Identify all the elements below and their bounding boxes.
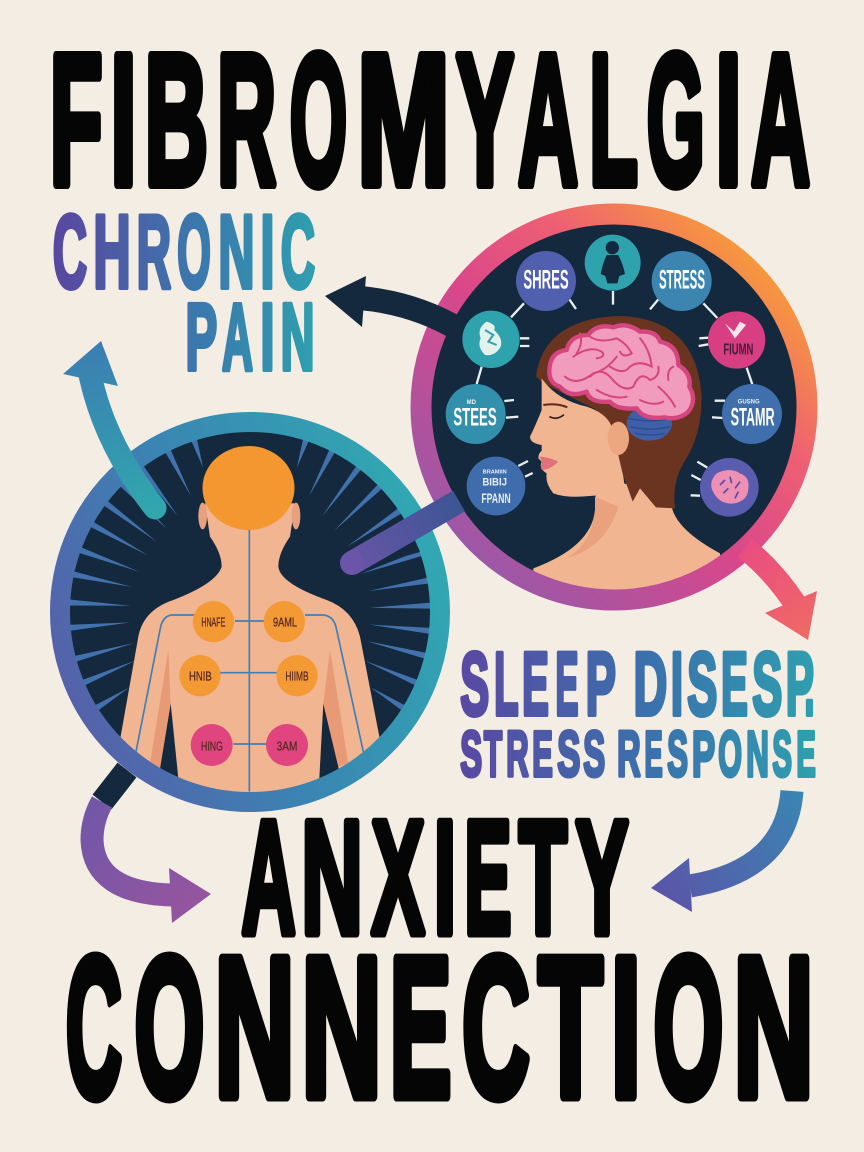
figure: back of torso xyxy=(120,503,380,793)
heading: Sleep disesp: E xyxy=(556,634,578,734)
bubble: STEES: MD xyxy=(467,400,477,406)
bubble: PAIN small text: BRAMIIN xyxy=(483,469,507,475)
arrow: dark arrow to chronic pain xyxy=(325,276,460,330)
heading: Stress response: O xyxy=(718,718,742,790)
heading: Stress response: S xyxy=(583,718,605,790)
pain points with labels: HIIMB xyxy=(285,669,309,684)
title: Fibromyalgia: O xyxy=(290,17,347,224)
heading: Stress response: S xyxy=(772,718,792,790)
title: Connection: O xyxy=(134,917,204,1139)
heading: Stress response: T xyxy=(484,718,502,790)
title: Connection: C xyxy=(462,917,530,1139)
heading: Stress response: N xyxy=(746,718,769,790)
heading: Pain: I xyxy=(260,284,275,390)
head xyxy=(202,446,294,530)
heading: Stress response: E xyxy=(532,718,553,790)
heading: Stress response: R xyxy=(506,718,529,790)
figure: woman profile xyxy=(530,316,723,590)
ring xyxy=(60,422,440,802)
bubble: SHRES: SHRES xyxy=(523,264,569,294)
heading: Pain: P xyxy=(186,284,217,390)
heading: Sleep disesp: L xyxy=(494,634,518,734)
ring xyxy=(421,214,807,600)
title: Fibromyalgia: B xyxy=(145,17,208,224)
heading: Sleep disesp: S xyxy=(752,634,782,734)
topic bubbles with connectors xyxy=(446,235,782,517)
title: Anxiety: E xyxy=(464,788,512,968)
heading: Stress response: S xyxy=(460,718,482,790)
bubble: person icon xyxy=(585,235,641,291)
title: Connection: O xyxy=(654,917,723,1139)
radiating rays xyxy=(69,439,431,710)
title: Anxiety: X xyxy=(372,788,424,968)
title: Anxiety: T xyxy=(519,788,567,968)
topic bubbles with connectors: STRESS xyxy=(659,264,705,294)
bubble: body icon xyxy=(462,311,520,368)
arrow: purple connector between circles xyxy=(340,501,459,575)
heading: Chronic: H xyxy=(93,194,131,310)
title: Fibromyalgia: Y xyxy=(456,17,514,224)
heading: Sleep disesp: S xyxy=(460,634,489,734)
text: C xyxy=(281,194,315,310)
heading: Chronic: I xyxy=(260,194,275,310)
heading: Sleep disesp: D xyxy=(634,634,667,734)
heading: Sleep disesp: E xyxy=(522,634,549,734)
title: Fibromyalgia: L xyxy=(589,17,638,224)
title: Anxiety: N xyxy=(301,788,363,968)
heading: Stress response: E xyxy=(644,718,663,790)
bubble: PAIN small text: BIBIJ xyxy=(482,476,507,488)
text: . xyxy=(804,634,815,734)
text: N xyxy=(281,284,314,390)
title: Connection: C xyxy=(66,917,122,1139)
heading: Pain: A xyxy=(222,284,253,390)
title: Connection: N xyxy=(214,917,295,1139)
heading: Chronic: N xyxy=(218,194,255,310)
bubble: PAIN small text: FPANN xyxy=(481,490,511,506)
panel: brain and head circle xyxy=(421,214,807,600)
pain points with labels: HNIB xyxy=(189,669,212,684)
brain xyxy=(549,325,693,441)
title: Fibromyalgia: I xyxy=(110,17,137,224)
text: Y xyxy=(576,788,628,968)
heading: Stress response: S xyxy=(557,718,580,790)
text: P xyxy=(786,634,814,734)
title: Anxiety: A xyxy=(242,788,296,968)
bubble: arrow and FIUMN xyxy=(708,311,765,369)
heading: Stress response: R xyxy=(617,718,641,790)
title: Anxiety: I xyxy=(434,788,456,968)
pain points with labels: HING xyxy=(201,739,223,754)
text: E xyxy=(796,718,816,790)
heading: Sleep disesp: E xyxy=(721,634,748,734)
bubble: STAMR xyxy=(722,384,782,444)
heading: Sleep disesp: P xyxy=(586,634,615,734)
title: Fibromyalgia: F xyxy=(50,17,103,224)
title: Fibromyalgia: I xyxy=(715,17,742,224)
title: Fibromyalgia: G xyxy=(647,17,705,224)
arrow: bottom-right curved arrow to anxiety xyxy=(651,791,792,912)
bubble: pink brain xyxy=(700,458,759,517)
pain points with labels: 3AM xyxy=(277,739,297,754)
heading: Stress response: P xyxy=(692,718,715,790)
heading: Chronic: O xyxy=(177,194,211,310)
title: Fibromyalgia: M xyxy=(357,17,450,224)
title: Fibromyalgia: A xyxy=(518,17,578,224)
heading: Sleep disesp: S xyxy=(687,634,717,734)
title: Connection: I xyxy=(611,917,641,1139)
arrow: pink arrow to sleep xyxy=(745,548,817,640)
arrow: bottom-left curved arrow to anxiety xyxy=(92,770,211,923)
bubble: STRESS xyxy=(652,251,712,311)
panel: body pain circle xyxy=(60,422,440,802)
title: Connection: T xyxy=(538,917,603,1139)
heading: Chronic: R xyxy=(136,194,171,310)
heading: Stress response: S xyxy=(667,718,688,790)
bubble: SHRES xyxy=(516,251,576,311)
title: Connection: N xyxy=(301,917,382,1139)
circle background xyxy=(66,428,434,796)
pain points with labels: 9AML xyxy=(273,615,297,630)
title: Connection: E xyxy=(390,917,452,1139)
heading: Sleep disesp: I xyxy=(671,634,683,734)
bubble: arrow and FIUMN: FIUMN xyxy=(723,341,753,358)
circle background xyxy=(430,222,798,590)
bubble: PAIN small text xyxy=(467,457,525,515)
bubble: STEES xyxy=(446,384,506,444)
heading: Chronic: C xyxy=(53,194,87,310)
bubble: STAMR: STAMR xyxy=(731,403,775,431)
pain points with labels xyxy=(179,601,318,766)
arrow: teal up arrow xyxy=(63,341,155,508)
bubble: STEES: STEES xyxy=(453,403,497,431)
bubble: STAMR: GUSNG xyxy=(738,399,760,406)
title: Fibromyalgia: R xyxy=(217,17,276,224)
pain points with labels: HNAFE xyxy=(201,615,225,630)
